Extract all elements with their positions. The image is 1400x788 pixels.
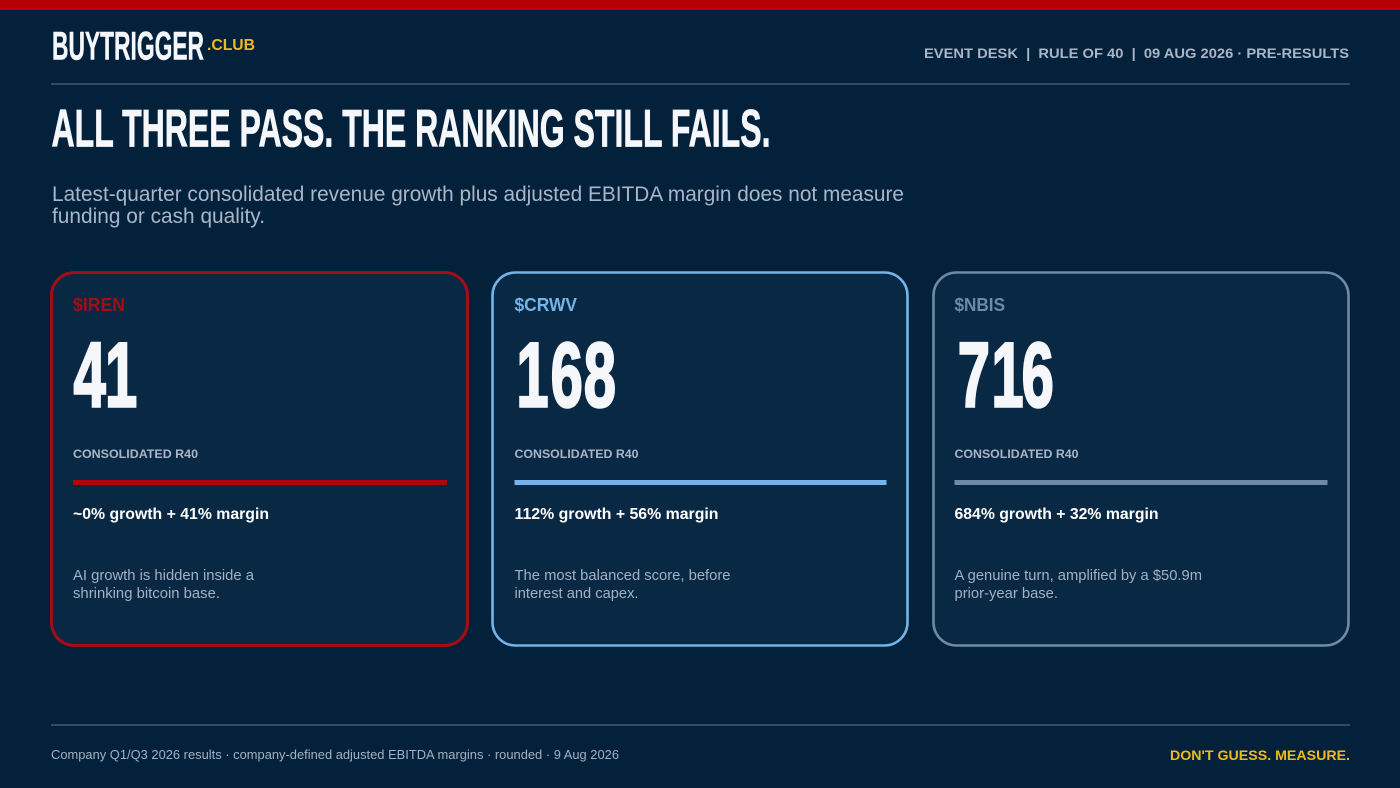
accent rule xyxy=(73,480,447,485)
ticker: $CRWV xyxy=(514,295,577,315)
score: 168 xyxy=(516,324,616,427)
note: The most balanced score, before xyxy=(514,567,730,584)
note: shrinking bitcoin base. xyxy=(73,585,220,602)
subtitle: funding or cash quality. xyxy=(52,205,265,228)
panel: NBIS xyxy=(934,272,1348,646)
score label: CONSOLIDATED R40 xyxy=(954,447,1079,461)
formula: 112% growth + 56% margin xyxy=(514,506,718,523)
title: ALL THREE PASS. THE RANKING STILL FAILS. xyxy=(52,100,770,158)
accent rule xyxy=(954,480,1328,485)
ticker: $IREN xyxy=(73,295,125,315)
accent rule xyxy=(514,480,886,485)
note xyxy=(514,567,730,602)
footer tagline: DON'T GUESS. MEASURE. xyxy=(1170,747,1350,763)
note: AI growth is hidden inside a xyxy=(73,567,255,584)
logo: BUYTRIGGER xyxy=(52,25,204,69)
score: 716 xyxy=(958,324,1054,427)
header meta text: EVENT DESK | RULE OF 40 | 09 AUG 2026 · PRE-RESULTS xyxy=(924,45,1349,61)
subtitle: Latest-quarter consolidated revenue growth plus adjusted EBITDA margin does not measure xyxy=(52,183,904,206)
note xyxy=(954,567,1202,602)
logo: .CLUB xyxy=(207,37,255,54)
subtitle xyxy=(52,183,904,228)
panel: CRWV xyxy=(492,272,908,646)
note: interest and capex. xyxy=(514,585,638,602)
score: 41 xyxy=(74,324,137,427)
ticker: $NBIS xyxy=(954,295,1005,315)
footer source text: Company Q1/Q3 2026 results · company-defined adjusted EBITDA margins · rounded · 9 Aug 2026 xyxy=(51,747,619,762)
formula: 684% growth + 32% margin xyxy=(954,506,1158,523)
panel: IREN xyxy=(52,272,468,646)
note: A genuine turn, amplified by a $50.9m xyxy=(954,567,1202,584)
formula: ~0% growth + 41% margin xyxy=(73,506,269,523)
note xyxy=(73,567,255,602)
score label: CONSOLIDATED R40 xyxy=(73,447,198,461)
top accent bar xyxy=(0,0,1400,10)
note: prior-year base. xyxy=(954,585,1058,602)
score label: CONSOLIDATED R40 xyxy=(514,447,639,461)
